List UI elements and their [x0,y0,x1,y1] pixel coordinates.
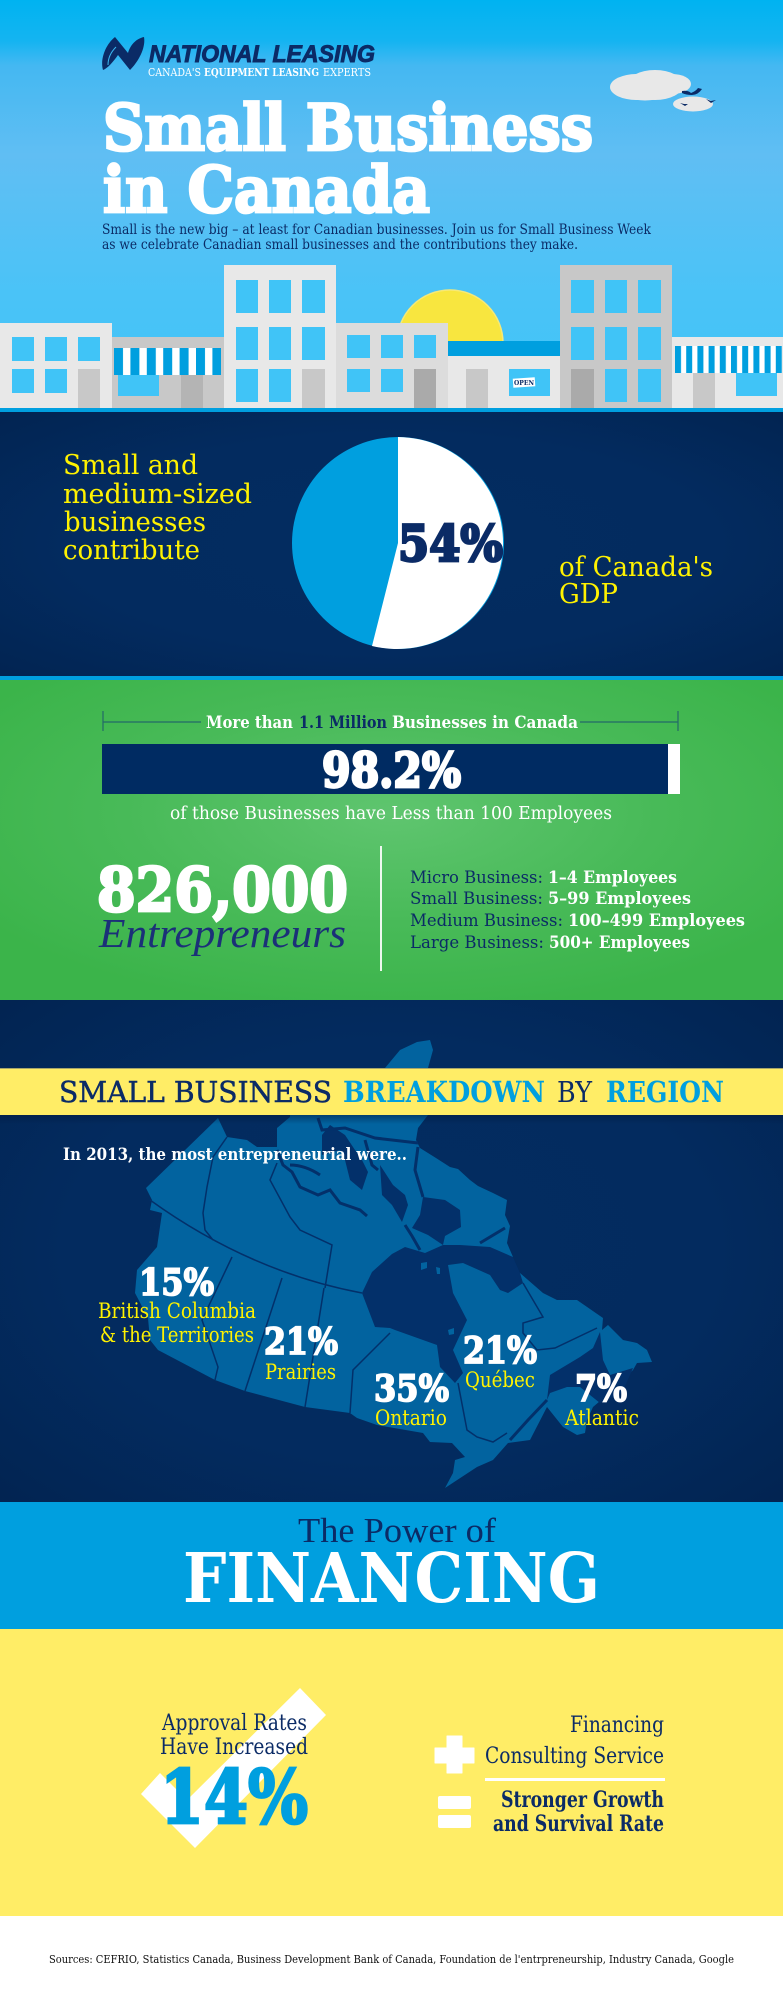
stat: 826,000 entrepreneurs: Entrepreneurs [98,910,346,956]
stat: 826,000 entrepreneurs: 826,000 [97,855,348,926]
logo tagline: EQUIPMENT LEASING [204,66,319,79]
panel: breakdown by region [0,1000,783,1502]
region: Ontario [374,1368,449,1430]
list: business size definitions: 100–499 Employees [568,911,745,930]
text: financing plus consulting: Financing [570,1713,664,1738]
region: Atlantic: Atlantic [564,1406,639,1430]
bar: 98.2 percent [102,743,680,799]
icon: check mark [141,1688,326,1848]
Arctic waters [322,1125,461,1245]
region: Quebec: Québec [465,1368,535,1392]
Gulf of St Lawrence [547,1332,633,1403]
region: Prairies [264,1321,338,1384]
text: approval rates: Have Increased [160,1735,308,1760]
region: British Columbia and Territories: 15% [139,1262,214,1304]
text: stronger growth: and Survival Rate [493,1811,664,1837]
region: Quebec [463,1330,537,1392]
text: financing plus consulting: Consulting Service [485,1744,664,1769]
region: Prairies: 21% [264,1321,338,1363]
pie value: 54% [398,514,503,573]
intro text: as we celebrate Canadian small businesses and the contributions they make. [102,237,578,253]
icon: National Leasing logo mark [102,37,144,70]
caption: less than 100 employees: of those Businesses have Less than 100 Employees [170,804,612,824]
text: of Canada's GDP: GDP [559,579,618,610]
text: financing plus consulting [485,1713,664,1769]
region: Atlantic: 7% [575,1368,627,1410]
logo tagline: CANADA'S [148,66,201,79]
region: Quebec: 21% [463,1330,537,1372]
bracket: 1.1 million businesses: 1.1 Million [299,713,387,733]
illustration: street of buildings: OPEN [514,379,534,387]
heading banner: BY [557,1075,593,1109]
list: business size definitions [410,868,745,952]
list: business size definitions: 500+ Employees [549,933,690,952]
bracket: 1.1 million businesses: Businesses in Canada [392,713,578,733]
text: stronger growth [493,1787,664,1837]
list: business size definitions: 5–99 Employees [548,889,691,908]
Hudson Bay and Hudson Strait [362,1245,523,1383]
bracket: 1.1 million businesses: More than [206,713,293,733]
list: business size definitions: Micro Business: [410,868,543,887]
text: of Canada's GDP [559,552,713,610]
text: stronger growth: Stronger Growth [501,1787,664,1813]
text: approval rates: Approval Rates [161,1711,307,1736]
logo tagline: EXPERTS [323,66,371,79]
text: small and medium-sized businesses contribute: businesses [64,507,206,538]
title: in Canada [103,153,430,228]
logo wordmark: NATIONAL LEASING [149,41,375,68]
region: Prairies: Prairies [265,1360,336,1384]
heading banner: SMALL BUSINESS [59,1075,332,1109]
pie chart: 54 percent [292,437,504,649]
list: business size definitions: Large Business: [410,933,544,952]
intro text [102,222,652,253]
text: of Canada's GDP: of Canada's [559,552,713,583]
region: Atlantic [564,1368,639,1430]
bar: 98.2 percent: 98.2% [322,743,461,799]
region: British Columbia and Territories: British Columbia [98,1299,256,1323]
logo tagline [148,66,371,79]
panel: header sky [0,0,783,408]
intro text: Small is the new big – at least for Canadian businesses. Join us for Small Business Week [102,222,652,238]
islands in the bay [421,1262,454,1335]
heading banner [0,1068,783,1124]
panel: GDP share [0,408,783,680]
province borders [150,1137,597,1442]
panel: the power of financing heading [0,1502,783,1629]
icon: clouds and birds [610,70,716,112]
list: business size definitions: Small Business: [410,889,543,908]
map: Canada [135,1040,652,1488]
panel: businesses and entrepreneurs [0,680,783,1000]
panel: financing benefits [0,1629,783,1916]
region: Ontario: 35% [374,1368,449,1410]
region: British Columbia and Territories: & the Territories [100,1323,254,1347]
region: British Columbia and Territories [98,1262,256,1347]
heading: financing: FINANCING [183,1539,600,1619]
title: Small Business [103,91,593,166]
icon: equals [438,1796,471,1828]
text: small and medium-sized businesses contribute: Small and [63,450,198,481]
icon: plus [435,1736,474,1773]
text: small and medium-sized businesses contribute: contribute [63,535,200,566]
panel: the power of financing heading: The Power of [298,1511,496,1550]
list: business size definitions: Medium Business: [410,911,563,930]
title [103,91,593,228]
illustration: street of buildings [0,265,783,408]
text: small and medium-sized businesses contribute [63,450,252,566]
stat: 826,000 entrepreneurs [97,855,348,956]
text: in 2013: In 2013, the most entrepreneurial were.. [63,1145,407,1165]
text: small and medium-sized businesses contribute: medium-sized [63,479,252,510]
list: business size definitions: 1–4 Employees [548,868,677,887]
icon: sun [397,290,503,396]
bracket: 1.1 million businesses [103,711,678,733]
region: Ontario: Ontario [375,1406,447,1430]
heading banner: BREAKDOWN [343,1075,545,1109]
heading banner: REGION [606,1075,724,1109]
text: approval rates [160,1711,308,1760]
stat: 14 percent: 14% [160,1755,308,1841]
